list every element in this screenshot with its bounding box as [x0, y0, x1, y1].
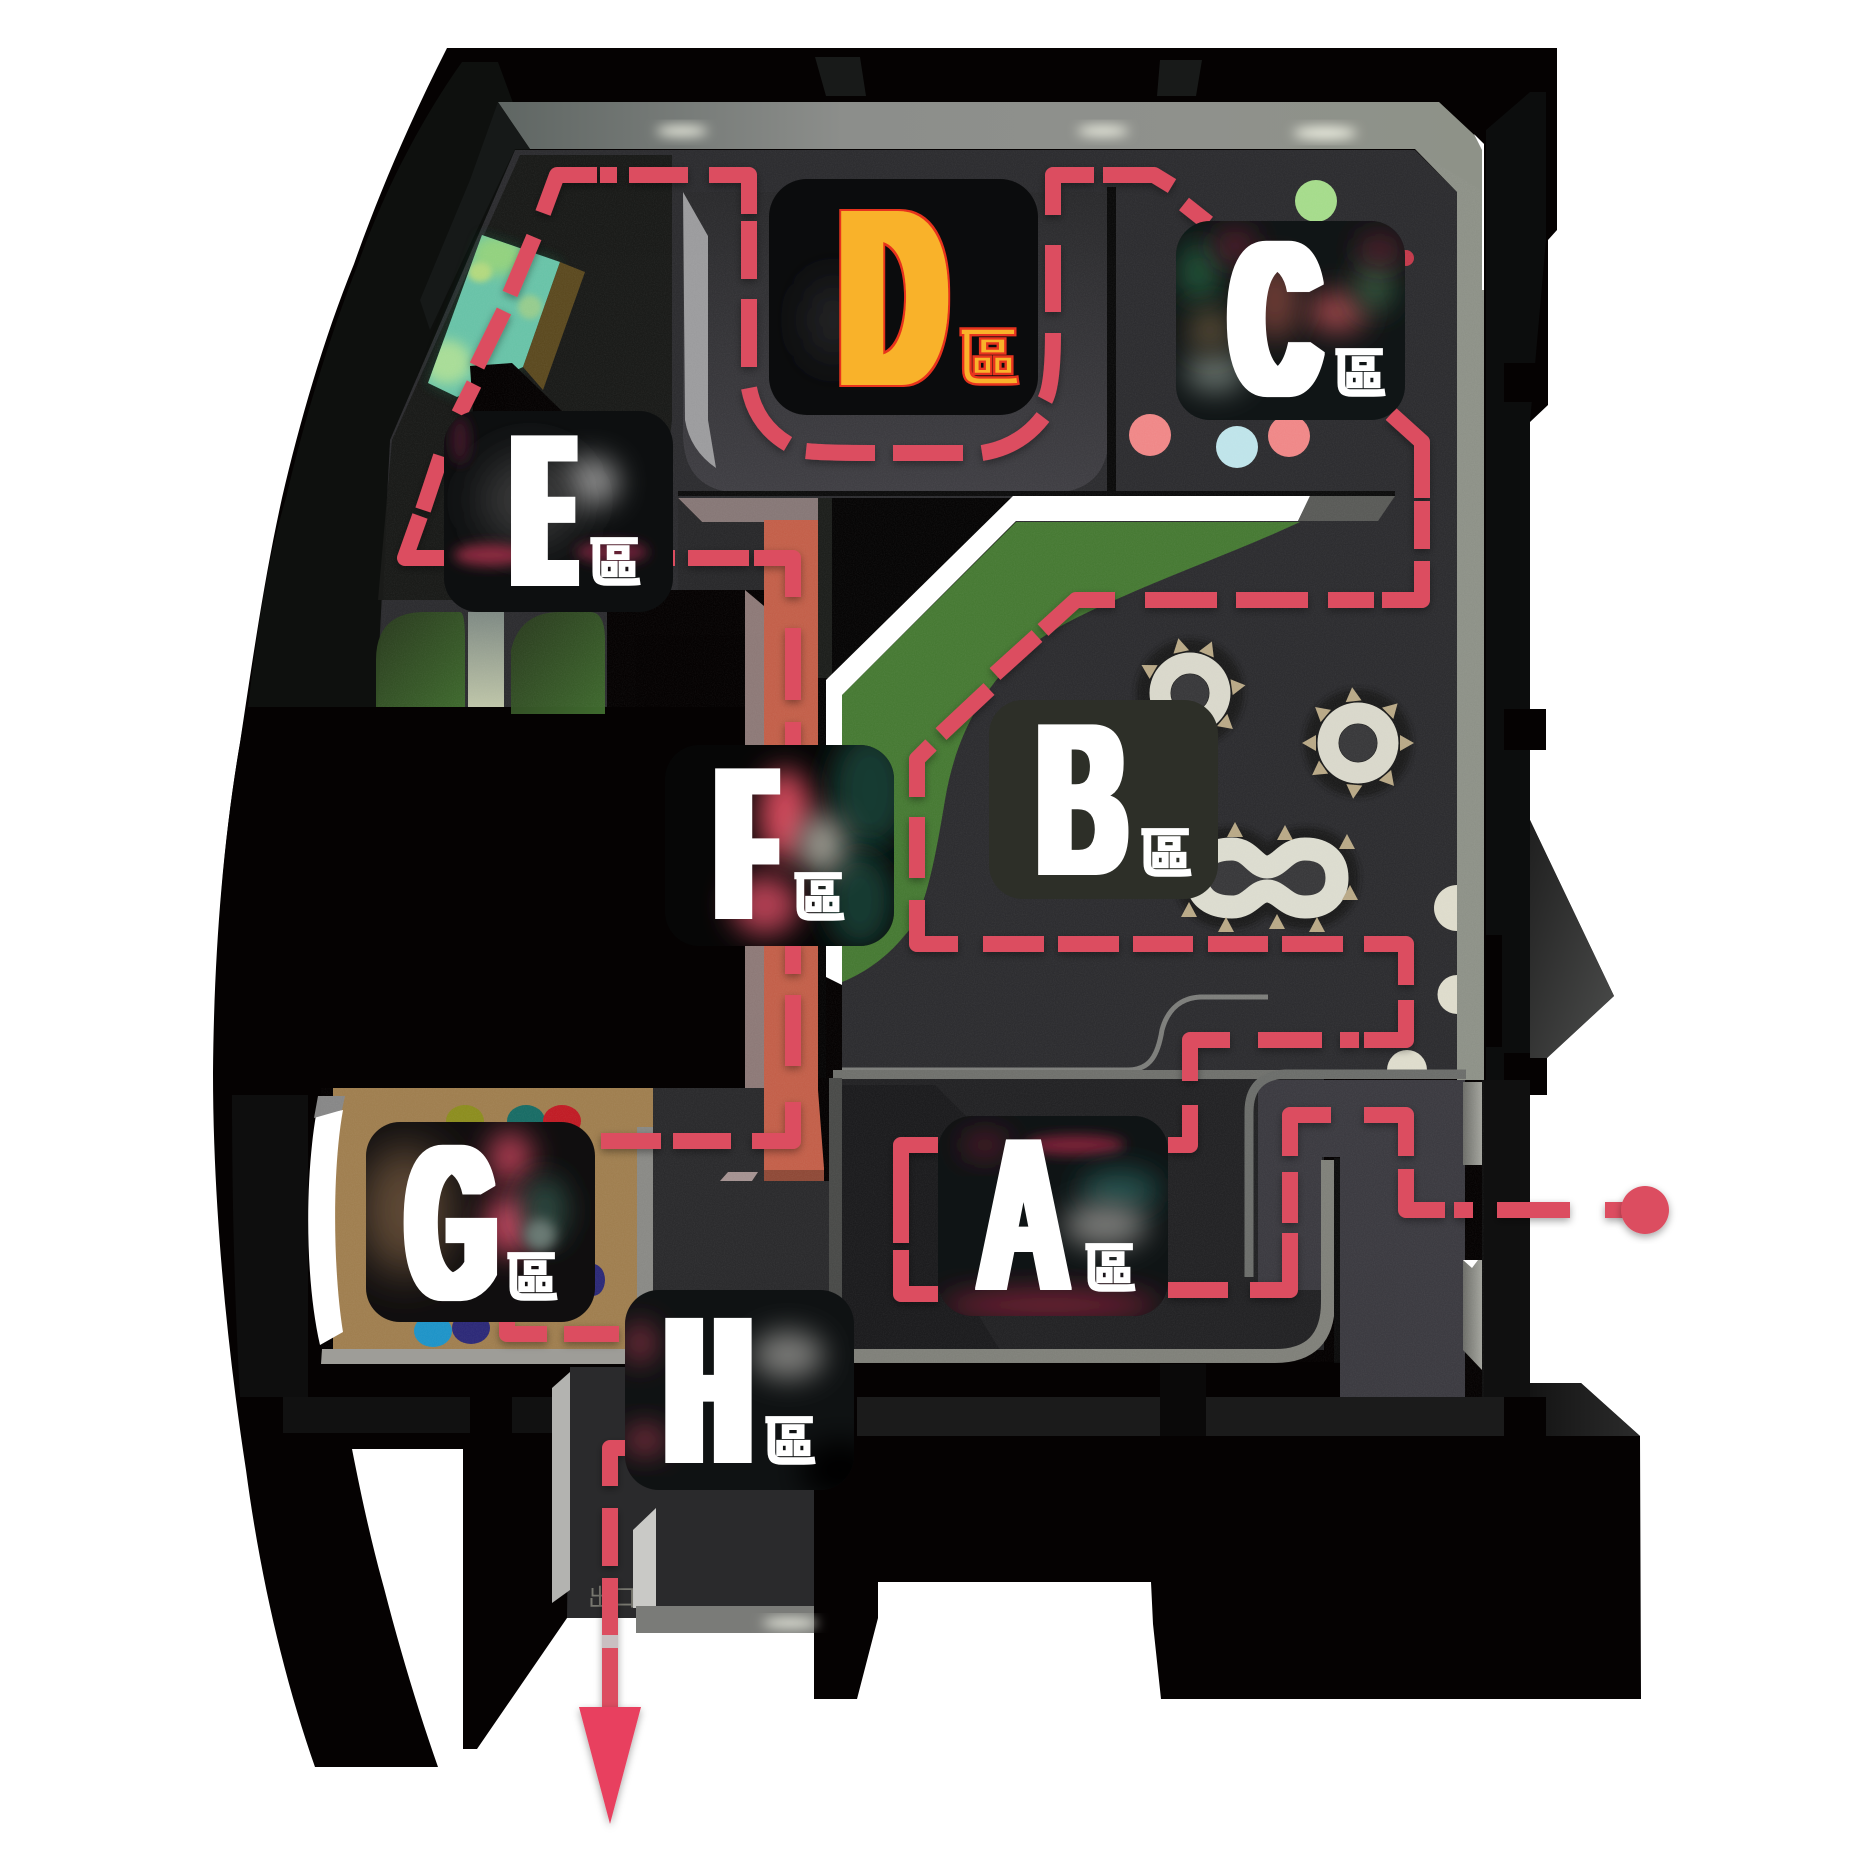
small step tile — [720, 1172, 758, 1181]
orange strip — [764, 520, 824, 1181]
right lower dark wall — [1482, 1080, 1530, 1397]
white lawn border — [826, 496, 1310, 985]
G room right wall — [637, 1127, 653, 1349]
lower left strip — [283, 1397, 552, 1433]
exit arrow — [579, 1707, 641, 1824]
ceiling struts — [815, 57, 1202, 96]
tag E — [444, 411, 673, 612]
G room bottom wall — [321, 1349, 630, 1364]
exit inner pillar — [633, 1508, 656, 1608]
tag H: H — [669, 1275, 748, 1507]
tag B: B — [1038, 678, 1126, 920]
wall balls — [1387, 885, 1457, 1070]
tag B — [989, 678, 1218, 920]
wall line beside middle floor — [829, 1078, 842, 1353]
right outer wall — [1486, 92, 1546, 1383]
tag G — [366, 1122, 595, 1322]
floor behind E — [678, 498, 764, 590]
middle floor — [653, 1088, 764, 1370]
inner curved corridor wall — [1249, 1074, 1466, 1277]
G room floor — [333, 1088, 653, 1349]
dark void beside orange strip — [818, 498, 1016, 1078]
G room balls — [414, 1105, 605, 1347]
gear 2 — [1302, 686, 1414, 799]
right corridor floor — [1258, 1080, 1465, 1397]
right wall posts — [1484, 363, 1546, 1095]
exit left wall — [552, 1372, 570, 1603]
dark strip beside orange — [818, 498, 832, 678]
partition wall in room B — [842, 997, 1268, 1070]
green lawn — [842, 522, 1300, 982]
tag D: D — [843, 158, 943, 437]
tag C — [1176, 221, 1405, 420]
coloured dots — [1129, 180, 1414, 468]
floor strip below wall — [857, 1397, 1504, 1436]
corner post — [1504, 1397, 1546, 1436]
wall above orange strip — [678, 498, 818, 522]
pink wall — [745, 590, 764, 1090]
wall left of G room — [232, 1095, 308, 1397]
tag B: 區 — [1139, 825, 1193, 885]
tag D: 區 — [957, 323, 1021, 395]
alcove right edge — [1107, 187, 1116, 493]
infinity track — [1181, 822, 1358, 932]
black segment under room A — [857, 1364, 1337, 1397]
tag E: E — [519, 389, 569, 631]
tag A — [938, 1116, 1168, 1316]
alcove around D — [683, 192, 1109, 493]
bevel lights — [656, 126, 1357, 139]
tag C: C — [1233, 198, 1317, 441]
tag G: 區 — [505, 1249, 559, 1309]
tag G: G — [408, 1102, 495, 1345]
tag F: F — [723, 722, 770, 964]
tag A: A — [979, 1093, 1068, 1335]
room A outer curved wall — [842, 1160, 1328, 1356]
tag H — [625, 1290, 854, 1490]
grey step — [1298, 496, 1395, 521]
right corridor lights — [1463, 1082, 1482, 1370]
upper left room shading — [378, 155, 672, 600]
tag F: 區 — [792, 869, 846, 929]
lower wall below room B — [833, 1070, 1466, 1079]
tag A: 區 — [1083, 1240, 1137, 1300]
route: dashed red path — [405, 175, 1625, 1708]
bevel right highlight — [1474, 134, 1484, 290]
exit floor — [567, 1367, 814, 1633]
window in upper left — [423, 235, 585, 412]
post in strip — [1160, 1364, 1206, 1436]
top bevel wall — [498, 102, 1484, 1080]
left bottom shadow block — [470, 1397, 512, 1457]
floor: main level — [376, 150, 1457, 1075]
bevel corner shadow — [420, 102, 530, 330]
gear 1 — [1136, 637, 1247, 747]
exit bottom wall — [636, 1606, 814, 1633]
room A dark corner — [842, 1085, 1000, 1350]
G room window frame — [314, 1096, 345, 1118]
room A floor — [842, 1079, 1324, 1350]
start point — [1621, 1186, 1669, 1234]
black central block — [214, 590, 745, 1088]
tag C: 區 — [1333, 345, 1387, 405]
horizontal shadow under upper rooms — [678, 491, 1395, 496]
tag D — [769, 179, 1038, 415]
G room window — [308, 1110, 343, 1345]
tag H: 區 — [763, 1413, 817, 1473]
alcove left highlight — [683, 192, 716, 468]
orange strip foot — [764, 1170, 824, 1181]
pillar — [468, 612, 504, 708]
exit wall light — [762, 1618, 818, 1628]
exit floor mark: 出口 — [588, 1585, 636, 1612]
right wedge — [1530, 820, 1614, 1058]
lower wall post — [1530, 1383, 1640, 1436]
building silhouette — [213, 48, 1641, 1767]
tag E: 區 — [588, 534, 642, 594]
tag F — [711, 745, 894, 946]
corridor wall cap — [1334, 1158, 1340, 1363]
left outer wall tint — [248, 62, 530, 707]
noise overlay — [323, 150, 1484, 1397]
green arches — [376, 612, 605, 714]
